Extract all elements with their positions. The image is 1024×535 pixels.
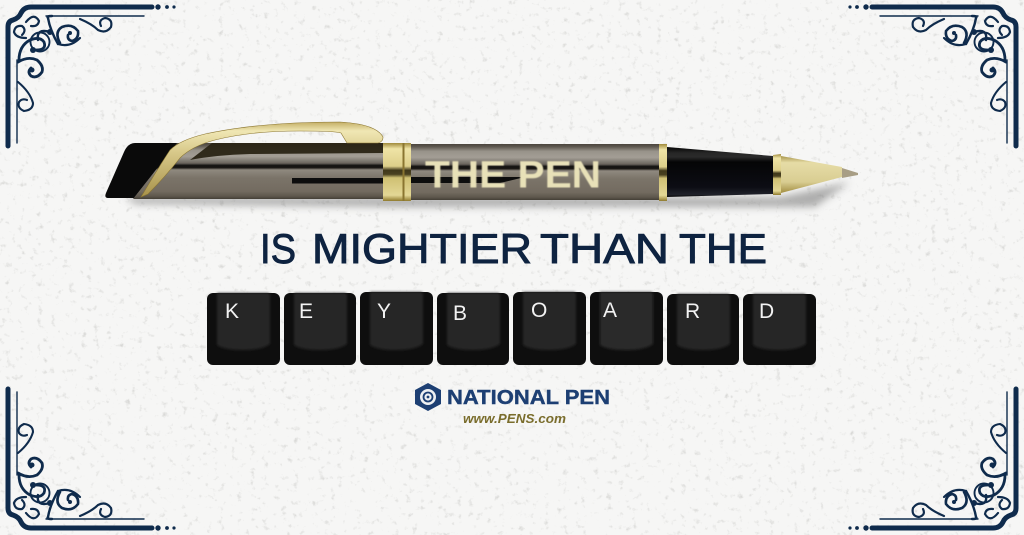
corner ornament: bottom left bbox=[8, 389, 176, 531]
key A bbox=[590, 292, 663, 365]
pen black grip bbox=[667, 147, 773, 197]
key K bbox=[207, 293, 280, 365]
logo icon bbox=[415, 383, 441, 411]
keyboard keys bbox=[207, 292, 816, 365]
key R bbox=[667, 294, 739, 365]
logo: National Pen bbox=[415, 383, 610, 426]
pen cone bbox=[781, 156, 842, 193]
corner ornament: top left bbox=[8, 4, 176, 146]
heading bbox=[260, 225, 767, 272]
heading: THE bbox=[679, 225, 767, 272]
key B bbox=[437, 293, 509, 365]
pen nib bbox=[842, 168, 858, 178]
key B: B bbox=[453, 302, 467, 325]
key O: O bbox=[531, 299, 547, 322]
key D bbox=[743, 294, 816, 365]
key R: R bbox=[685, 300, 700, 323]
corner ornament: top right bbox=[848, 4, 1016, 146]
key Y: Y bbox=[377, 300, 391, 323]
pen end cap bbox=[105, 143, 178, 198]
key E: E bbox=[299, 300, 313, 323]
pen clip bbox=[141, 122, 383, 197]
heading: MIGHTIER bbox=[312, 225, 532, 272]
heading: THAN bbox=[540, 225, 669, 272]
key K: K bbox=[225, 300, 239, 323]
logo wordmark: NATIONAL PEN bbox=[447, 387, 610, 409]
pen barrel right bbox=[411, 144, 659, 200]
heading: IS bbox=[260, 225, 296, 272]
pen gold band bbox=[383, 143, 411, 201]
key O bbox=[513, 292, 586, 365]
key A: A bbox=[603, 299, 617, 322]
pen barrel left bbox=[133, 143, 384, 199]
key D: D bbox=[759, 300, 774, 323]
key Y bbox=[360, 292, 433, 365]
key E bbox=[284, 293, 356, 365]
pen illustration bbox=[105, 122, 858, 207]
pen gold ring bbox=[659, 144, 667, 201]
corner ornament: bottom right bbox=[848, 389, 1016, 531]
logo url: www.PENS.com bbox=[463, 412, 566, 426]
pen label: THE PEN bbox=[425, 154, 601, 196]
pen tip ring bbox=[773, 154, 781, 195]
pen shadow bbox=[125, 182, 850, 207]
